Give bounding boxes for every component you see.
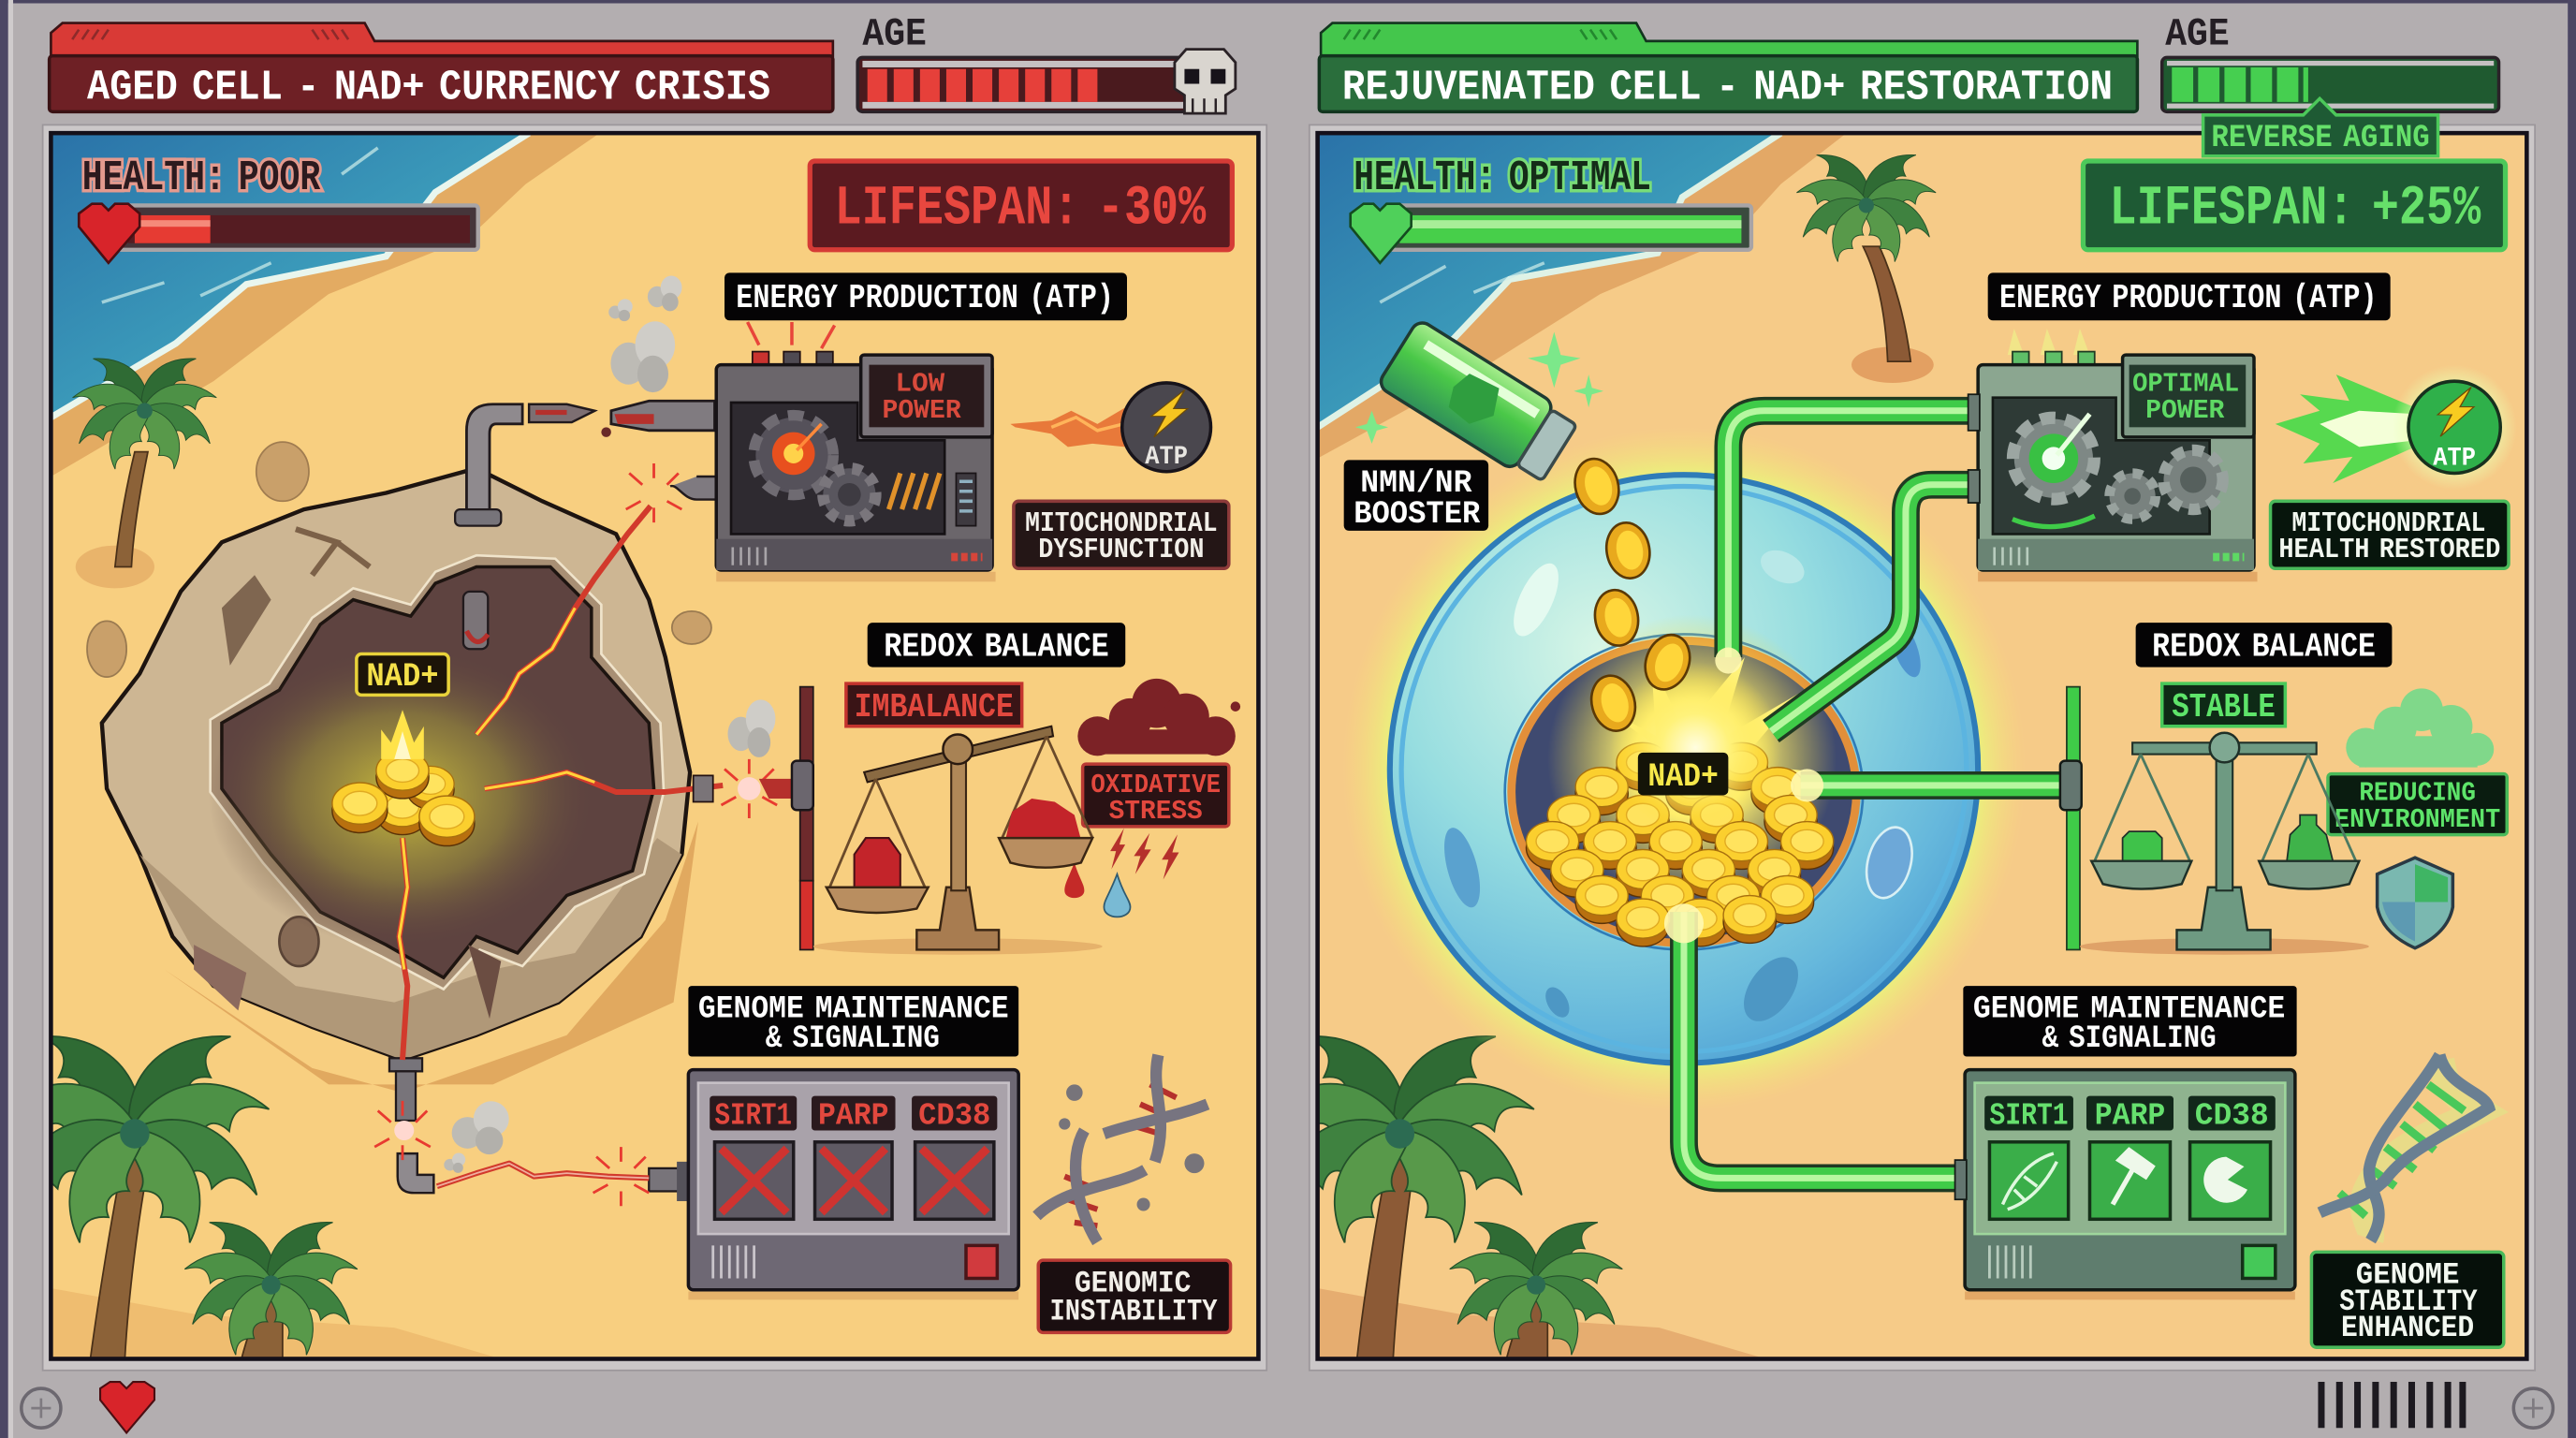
callout: mitochondrial health restored <box>2271 501 2509 568</box>
panel: rejuvenated cell <box>1261 11 2526 1360</box>
aged cell rocky membrane <box>102 468 698 1093</box>
section label: energy production restored: ENERGY PRODUCTION (ATP) <box>1999 279 2378 317</box>
section label: genome restored: GENOME MAINTENANCE <box>1973 991 2285 1027</box>
age meter restored <box>2162 11 2499 111</box>
broken DNA <box>1036 1055 1208 1242</box>
palm tree: upper right <box>1794 140 1938 361</box>
callout: genomic instability: INSTABILITY <box>1050 1294 1218 1328</box>
callout: mitochondrial dysfunction <box>1014 501 1229 568</box>
palm tree: lower left large <box>52 1035 270 1357</box>
stress bolts and drops <box>1064 829 1178 917</box>
ATP strong icon: ATP <box>2433 445 2476 474</box>
age meter aged: AGE <box>862 11 927 56</box>
enzyme tags aged: SIRT1 <box>714 1098 792 1134</box>
lifespan badge restored <box>2083 161 2506 250</box>
callout: oxidative stress: OXIDATIVE <box>1090 770 1221 800</box>
callout: oxidative stress: STRESS <box>1109 796 1203 827</box>
nucleus vault with coin pile <box>1505 614 1863 949</box>
label: NMN/NR booster: NMN/NR <box>1360 466 1472 502</box>
age meter aged <box>857 11 1236 113</box>
enzyme tags aged: PARP <box>818 1098 889 1134</box>
enzyme tags restored: CD38 <box>2195 1098 2269 1134</box>
label: NAD+ restored: NAD+ <box>1647 758 1719 796</box>
section label: redox balance aged: REDOX BALANCE <box>884 627 1109 666</box>
callout: genome stability enhanced: ENHANCED <box>2341 1311 2474 1345</box>
redox feed pipe aged <box>694 687 813 949</box>
active buttons <box>1989 1142 2271 1219</box>
callout: genomic instability: GENOMIC <box>1075 1267 1191 1301</box>
health bar restored: HEALTH: OPTIMAL <box>1354 154 1651 202</box>
glowing green pipes <box>1664 411 2062 1178</box>
scene: rejuvenated beach background <box>1318 133 2526 1358</box>
icon: skull <box>1175 50 1236 113</box>
sparks at breaks <box>374 463 777 1206</box>
balance scale level <box>2080 733 2369 955</box>
section label: genome restored: & SIGNALING <box>2042 1021 2217 1057</box>
lifespan badge aged: LIFESPAN: -30% <box>835 177 1206 241</box>
age meter restored: AGE <box>2165 11 2230 56</box>
footer: heart icon <box>100 1382 154 1432</box>
palm tree: lower left small right panel <box>1449 1222 1623 1357</box>
section label: genome aged: GENOME MAINTENANCE <box>698 991 1009 1027</box>
callout: reducing environment: REDUCING <box>2359 778 2476 809</box>
callout: mitochondrial health restored: MITOCHONDRIAL <box>2291 507 2485 540</box>
lightning cracks <box>399 506 723 1186</box>
status tag: stable: STABLE <box>2172 688 2276 726</box>
mitochondria machine restored <box>1969 329 2258 581</box>
balance scale tilted <box>813 726 1103 955</box>
callout: reducing environment: ENVIRONMENT <box>2334 804 2500 835</box>
section label: genome aged: & SIGNALING <box>766 1021 940 1057</box>
section label: genome aged <box>688 986 1018 1057</box>
ATP weak icon: ATP <box>1145 443 1188 472</box>
ATP weak icon <box>1010 383 1211 472</box>
lifespan badge aged <box>810 161 1232 250</box>
callout: mitochondrial health restored: HEALTH RESTORED <box>2278 534 2500 566</box>
scene: aged beach background <box>51 133 1258 1358</box>
mitochondria machine aged: LOW <box>896 369 945 400</box>
callout: reducing environment <box>2328 774 2507 835</box>
mitochondria machine aged: POWER <box>882 395 961 426</box>
mitochondria machine restored: OPTIMAL <box>2132 369 2239 400</box>
falling coins and NMN/NR bottle <box>1355 318 1697 736</box>
label: NMN/NR booster <box>1344 460 1488 533</box>
palm tree: upper left <box>70 344 219 567</box>
label: NAD+ aged: NAD+ <box>366 658 439 696</box>
reducing environment cloud <box>2346 688 2494 768</box>
footer: screw left <box>22 1388 61 1428</box>
lifespan badge restored: LIFESPAN: +25% <box>2110 177 2481 241</box>
section label: energy production aged: ENERGY PRODUCTION (ATP) <box>736 279 1114 317</box>
footer: vent barcode <box>2321 1382 2463 1428</box>
palm tree: lower left small <box>184 1222 358 1357</box>
enzyme control panel aged <box>688 1070 1018 1299</box>
enzyme tags restored: SIRT1 <box>1989 1098 2069 1134</box>
redox feed pipe restored <box>2060 687 2082 949</box>
NAD+ coins depleted <box>332 710 475 846</box>
healthy cell bubble <box>1342 427 2026 1110</box>
smoke puffs <box>444 276 775 1173</box>
oxidative cloud <box>1077 679 1240 756</box>
enzyme tags restored: PARP <box>2095 1098 2165 1134</box>
tooltip: reverse aging: REVERSE AGING <box>2211 121 2430 156</box>
callout: mitochondrial dysfunction: MITOCHONDRIAL <box>1025 507 1218 540</box>
callout: oxidative stress <box>1083 764 1229 827</box>
header: aged cell title <box>50 23 833 111</box>
enzyme tags aged <box>710 1096 997 1134</box>
ATP strong icon <box>2276 365 2517 490</box>
enzyme control panel restored <box>1955 1070 2295 1299</box>
enzyme tags restored <box>1984 1096 2276 1134</box>
palm tree: lower left large right panel <box>1320 1035 1535 1357</box>
restored DNA helix <box>2320 1055 2489 1240</box>
mitochondria machine restored: POWER <box>2145 395 2225 426</box>
status tag: imbalance: IMBALANCE <box>855 688 1014 726</box>
health bar restored <box>1351 154 1751 263</box>
header: aged cell title: AGED CELL - NAD+ CURRENCY CRISIS <box>87 63 770 111</box>
health bar aged <box>79 154 478 263</box>
broken pipes aged <box>389 401 716 1201</box>
panel: aged cell <box>0 11 1258 1360</box>
callout: genome stability enhanced: STABILITY <box>2339 1284 2478 1319</box>
callout: genome stability enhanced <box>2311 1252 2504 1347</box>
callout: mitochondrial dysfunction: DYSFUNCTION <box>1038 534 1204 566</box>
disabled buttons <box>714 1142 994 1219</box>
icon: shield <box>2378 858 2452 948</box>
tooltip: reverse aging <box>2203 98 2438 156</box>
label: NMN/NR booster: BOOSTER <box>1354 497 1481 533</box>
header: rejuvenated cell title: REJUVENATED CELL - NAD+ RESTORATION <box>1342 63 2113 111</box>
callout: genomic instability <box>1038 1260 1231 1332</box>
health bar aged: HEALTH: POOR <box>82 154 321 202</box>
coin pile <box>1526 721 1834 946</box>
callout: genome stability enhanced: GENOME <box>2356 1258 2459 1293</box>
section label: redox balance restored: REDOX BALANCE <box>2152 627 2376 666</box>
enzyme tags aged: CD38 <box>918 1098 990 1134</box>
footer: screw right <box>2513 1388 2553 1428</box>
section label: genome restored <box>1963 986 2297 1057</box>
header: rejuvenated cell title <box>1319 23 2137 111</box>
mitochondria machine aged <box>716 322 996 581</box>
icon: bottle <box>1377 318 1580 487</box>
